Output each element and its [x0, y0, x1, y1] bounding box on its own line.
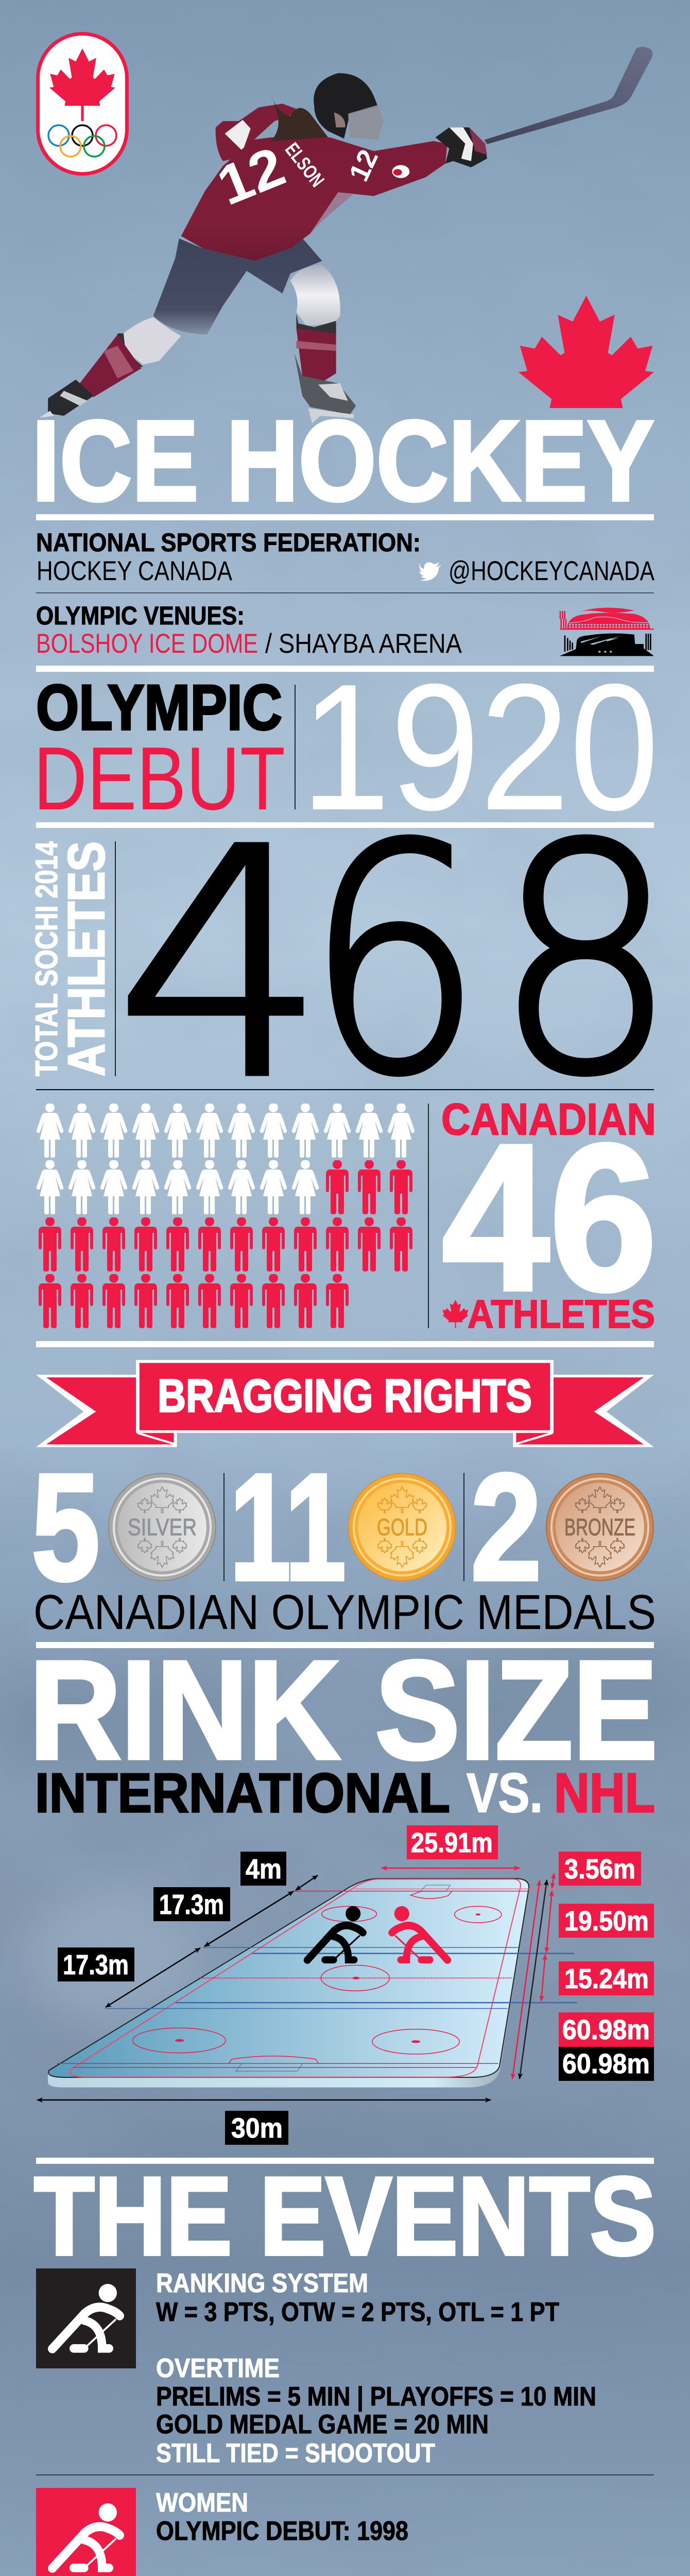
bronze medals: 2 [471, 1442, 542, 1612]
venues block: / SHAYBA ARENA [265, 629, 462, 659]
medal tally [31, 1442, 653, 1612]
icon: black hockey square [36, 2268, 136, 2368]
numeral 468 [115, 779, 677, 1146]
panel: ranking and overtime rules: RANKING SYSTEM [156, 2268, 368, 2298]
label: 60.98m international: 60.98m [562, 2048, 650, 2079]
ice surface [48, 1878, 577, 2088]
label: 60.98m NHL: 60.98m [562, 2014, 650, 2045]
icon: bronze medal [546, 1473, 653, 1581]
subheading: international vs NHL: NHL [554, 1761, 655, 1824]
row 4 men [39, 1274, 349, 1328]
federation block: HOCKEY CANADA [37, 556, 233, 586]
federation block: NATIONAL SPORTS FEDERATION: [36, 528, 421, 557]
pictogram: 22 women and 24 men [37, 1103, 415, 1328]
icon: silver medal [109, 1473, 216, 1581]
panel: ranking and overtime rules: W = 3 PTS, OTW = 2 PTS, OTL = 1 PT [156, 2297, 559, 2327]
row 3 men [39, 1217, 412, 1272]
federation block [36, 528, 655, 586]
row 2 women and men [37, 1160, 412, 1214]
label: 25.91m: 25.91m [411, 1827, 493, 1858]
label: 15.24m: 15.24m [564, 1963, 649, 1994]
hockey player: ELSON [281, 139, 328, 191]
hockey player: 12 [209, 134, 293, 217]
measurement arrows [37, 1868, 554, 2100]
bronze medals [471, 1442, 653, 1612]
olympic debut block: 1920 [301, 647, 659, 848]
panel: women: WOMEN [156, 2488, 248, 2518]
Canadian athletes count: ATHLETES [468, 1292, 655, 1336]
label: 17.3m upper: 17.3m [159, 1889, 224, 1920]
panel: women: OLYMPIC DEBUT: 1998 [156, 2516, 408, 2546]
label: 4m: 4m [246, 1854, 282, 1885]
olympic debut block: DEBUT [33, 728, 285, 828]
icon: bronze medal: BRONZE [564, 1514, 635, 1540]
panel: ranking and overtime rules: GOLD MEDAL GAME = 20 MIN [156, 2410, 489, 2439]
Canadian Olympic logo [38, 34, 127, 174]
banner: bragging rights: BRAGGING RIGHTS [158, 1370, 532, 1422]
numeral 468: 4 [115, 783, 326, 1146]
total athletes block: ATHLETES [58, 841, 115, 1076]
total athletes block [29, 779, 677, 1146]
large maple leaf [519, 296, 654, 408]
subheading: international vs NHL: INTERNATIONAL [35, 1761, 450, 1824]
panel: women [36, 2488, 654, 2576]
hockey player: 12 [343, 145, 384, 186]
total athletes block: TOTAL SOCHI 2014 [29, 841, 64, 1076]
icon: black player [307, 1906, 363, 1963]
numeral 468: 8 [495, 779, 677, 1143]
panel: ranking and overtime rules: STILL TIED = SHOOTOUT [156, 2438, 435, 2468]
label: 17.3m lower: 17.3m [63, 1950, 129, 1980]
venues block [36, 601, 654, 659]
banner: bragging rights [36, 1360, 654, 1447]
icon: silver medal: SILVER [128, 1514, 197, 1540]
icon: small maple leaf [442, 1300, 469, 1328]
rink diagram [37, 1825, 654, 2145]
icon: arenas [560, 608, 654, 656]
panel: ranking and overtime rules: PRELIMS = 5 MIN | PLAYOFFS = 10 MIN [156, 2382, 596, 2412]
icon: red player [392, 1906, 447, 1963]
icon: gold medal: GOLD [377, 1514, 427, 1540]
hockey player [39, 47, 652, 423]
silver medals: 5 [31, 1442, 100, 1612]
icon: twitter bird [419, 562, 441, 581]
subheading: international vs NHL: VS. [467, 1761, 543, 1824]
label: 3.56m: 3.56m [564, 1854, 635, 1885]
venues block: BOLSHOY ICE DOME [36, 629, 258, 659]
icon: red hockey square [36, 2488, 136, 2576]
olympic debut block [33, 647, 659, 848]
Canadian athletes count: 46 [442, 1100, 657, 1334]
Canadian athletes count: CANADIAN [441, 1095, 656, 1144]
gold medals: 11 [230, 1442, 346, 1612]
label: 30m: 30m [231, 2113, 283, 2144]
olympic debut block: OLYMPIC [36, 672, 282, 743]
silver medals [31, 1442, 216, 1612]
row 1 women [37, 1103, 415, 1158]
label: 19.50m: 19.50m [564, 1906, 649, 1937]
venues block: OLYMPIC VENUES: [36, 601, 245, 630]
panel: ranking and overtime rules: OVERTIME [156, 2353, 280, 2383]
numeral 468: 6 [305, 779, 483, 1143]
panel: ranking and overtime rules [36, 2268, 596, 2468]
icon: gold medal [349, 1473, 456, 1581]
